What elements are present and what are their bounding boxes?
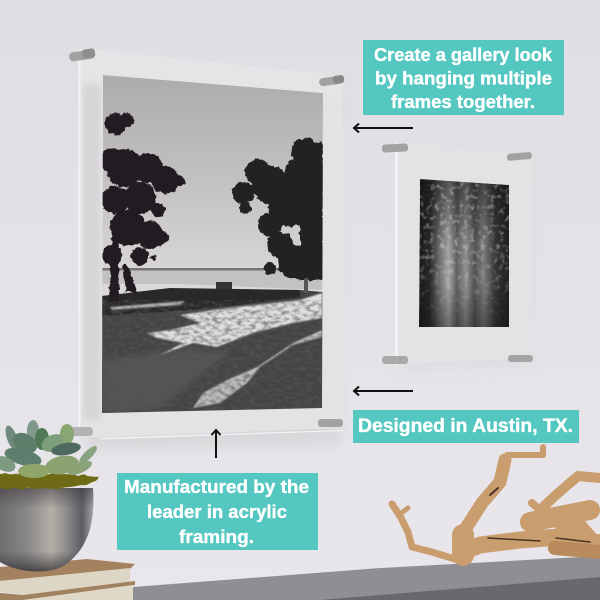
driftwood branch bbox=[392, 447, 600, 560]
small frame standoff bottom left bbox=[382, 356, 408, 364]
leaves bbox=[0, 420, 99, 478]
callout: manufactured by: framing. bbox=[179, 527, 254, 547]
beach photograph bbox=[100, 75, 325, 415]
callout: manufactured by: Manufactured by the bbox=[124, 477, 309, 497]
callout: designed in Austin: Designed in Austin, TX. bbox=[358, 415, 573, 437]
forest photograph bbox=[419, 179, 509, 327]
small acrylic frame bbox=[382, 142, 533, 370]
small frame standoff top left bbox=[382, 143, 408, 153]
standoff bottom right bbox=[318, 419, 343, 427]
small frame standoff bottom right bbox=[508, 355, 533, 362]
small frame standoff top right bbox=[507, 152, 532, 161]
large acrylic frame bbox=[69, 48, 345, 450]
callout: gallery look: Create a gallery look bbox=[374, 45, 553, 65]
horizon water bbox=[102, 270, 322, 290]
callout: gallery look: by hanging multiple bbox=[375, 68, 552, 88]
pointer arrow to frames, upper bbox=[354, 124, 413, 132]
succulent in metal pot bbox=[0, 420, 99, 571]
bench bbox=[216, 282, 232, 289]
sand grain bbox=[102, 300, 323, 415]
shadowed sand bbox=[102, 289, 323, 415]
left tree bbox=[100, 113, 185, 302]
callout: manufactured by: leader in acrylic bbox=[147, 502, 287, 522]
callout: designed in Austin bbox=[353, 410, 579, 443]
books bbox=[0, 559, 135, 600]
standoff top right bbox=[319, 75, 345, 87]
standoff top left bbox=[69, 48, 96, 62]
pointer arrow up to frame edge bbox=[212, 430, 220, 458]
pointer arrow to frames, lower bbox=[354, 386, 413, 396]
callout: manufactured by bbox=[117, 473, 318, 550]
trunk under right tree bbox=[304, 278, 308, 293]
callout: gallery look bbox=[363, 40, 564, 115]
sunlit sand bbox=[147, 293, 322, 355]
callout: gallery look: frames together. bbox=[391, 92, 535, 112]
right tree bbox=[232, 138, 325, 280]
standoff bottom left bbox=[70, 427, 93, 436]
metal pot bbox=[0, 488, 93, 571]
shelf bbox=[133, 556, 600, 600]
moss bbox=[0, 474, 98, 489]
